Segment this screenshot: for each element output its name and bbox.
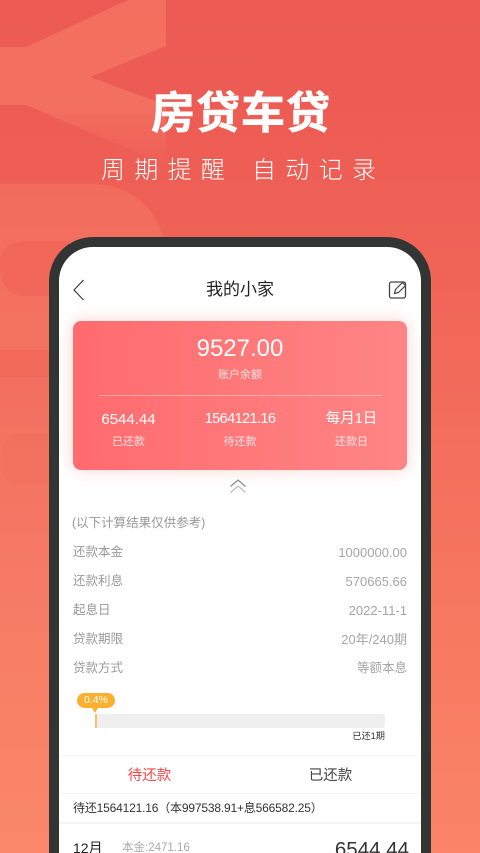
row: principal [73, 545, 407, 560]
progress badge [77, 693, 115, 708]
row: start date [73, 603, 407, 618]
stat: pending: 待还款 [224, 436, 256, 448]
icon: back arrow [73, 280, 84, 300]
subtitle: part two: 自动记录 [252, 150, 385, 185]
phone frame [49, 237, 431, 853]
row: start date: 2022-11-1 [349, 603, 407, 618]
title: 房贷车贷 [151, 77, 331, 141]
paid periods: 已还1期 [352, 731, 385, 741]
row: method [73, 661, 407, 675]
stat: paid: 已还款 [112, 436, 145, 448]
pending summary: 待还1564121.16（本997538.91+息566582.25） [73, 801, 323, 815]
row: term: 贷款期限 [73, 632, 123, 646]
row: term: 20年/240期 [341, 632, 407, 647]
row: start date: 起息日 [73, 603, 111, 617]
row: term [73, 632, 407, 647]
stat: pending [205, 411, 276, 448]
badge pointer [92, 708, 98, 716]
stat: paid: 6544.44 [101, 411, 156, 428]
stat: repayment day: 每月1日 [326, 411, 377, 427]
progress fill [95, 714, 97, 728]
stat: repayment day: 还款日 [335, 436, 368, 448]
subtitle: part one: 周期提醒 [101, 150, 234, 185]
stat: pending: 1564121.16 [205, 411, 275, 427]
stat: repayment day [326, 410, 377, 448]
balance label: 账户余额 [218, 369, 262, 381]
row: interest: 还款利息 [73, 574, 123, 588]
progress bar [77, 693, 385, 741]
progress badge: 0.4% [84, 694, 108, 706]
tab: pending: 待还款 [128, 768, 171, 784]
installment row [73, 838, 409, 853]
note: (以下计算结果仅供参考) [72, 516, 205, 530]
row: principal: 还款本金 [73, 545, 123, 559]
stat: paid [101, 411, 156, 448]
row: interest: 570665.66 [346, 574, 407, 589]
progress track [95, 714, 385, 728]
row: method: 等额本息 [357, 661, 407, 675]
panel: balance card [73, 321, 407, 470]
screen heading: 我的小家 [206, 280, 274, 299]
row: method: 贷款方式 [73, 661, 123, 675]
icon: edit [388, 281, 406, 299]
icon: collapse chevrons [230, 479, 246, 493]
tab: paid: 已还款 [309, 768, 352, 784]
row: interest [73, 574, 407, 589]
row: principal: 1000000.00 [338, 545, 407, 560]
balance amount: 9527.00 [197, 335, 283, 362]
loan details [73, 545, 407, 675]
